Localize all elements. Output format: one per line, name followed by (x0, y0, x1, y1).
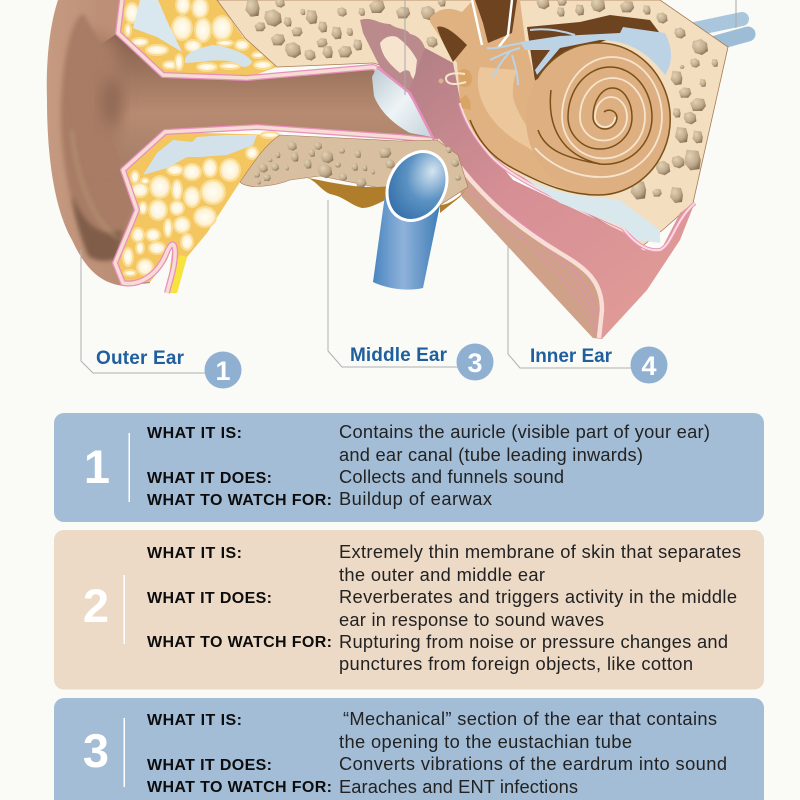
dark chamber behind nerves (527, 15, 665, 82)
mauve middle-ear tissue (360, 19, 460, 140)
details 3: Converts vibrations of the eardrum into sound (339, 753, 727, 774)
details 3: WHAT IT DOES: (147, 757, 272, 774)
eustachian tube (373, 141, 459, 290)
panel 2: eardrum (54, 530, 764, 690)
details 1: WHAT IT DOES: (147, 470, 272, 487)
details 3: WHAT TO WATCH FOR: (147, 779, 332, 796)
upper fat cells (125, 0, 272, 71)
callout: middle ear: Middle Ear (350, 345, 448, 366)
divider (124, 575, 125, 644)
details 2: WHAT IT IS: (147, 545, 242, 562)
details 2: WHAT TO WATCH FOR: (147, 634, 332, 651)
details 1: Buildup of earwax (339, 488, 492, 509)
lower bone pores (254, 141, 461, 187)
cochlear nerve bundle (487, 27, 671, 85)
callout: middle ear: 3 (467, 348, 483, 378)
upper cartilage band (185, 45, 252, 67)
number 2: 2 (83, 579, 109, 632)
details 3: WHAT IT IS: (147, 712, 242, 729)
details 3: “Mechanical” section of the ear that contains (343, 708, 717, 729)
eardrum border (377, 67, 434, 140)
details 2: WHAT IT DOES: (147, 590, 272, 607)
details 1: WHAT TO WATCH FOR: (147, 492, 332, 509)
details 2: Reverberates and triggers activity in the middle (339, 586, 737, 607)
number 1: 1 (84, 440, 110, 493)
details 3: Earaches and ENT infections (339, 776, 578, 797)
lower cartilage (143, 135, 257, 175)
details 2: Rupturing from noise or pressure changes and (339, 631, 728, 652)
bone pores (245, 0, 718, 203)
divider (128, 433, 130, 502)
canal shadow (102, 78, 122, 126)
leader line: top middle (404, 0, 406, 95)
lower temporal bone (240, 135, 468, 205)
muscle region (445, 150, 602, 338)
pink nasopharyngeal tissue (408, 48, 695, 339)
panel 3: middle ear (54, 698, 764, 800)
earwax buildup (303, 177, 390, 208)
details 2: punctures from foreign objects, like cotton (339, 653, 693, 674)
details 1: Collects and funnels sound (339, 466, 564, 487)
skin lining of the canal (115, 0, 432, 293)
temporal bone (217, 0, 728, 248)
lower fat cells (123, 132, 279, 276)
leader line: top right (735, 0, 737, 28)
callout: inner ear: 4 (641, 351, 657, 381)
semicircular canals and vestibule (430, 0, 620, 195)
callout: outer ear: 1 (215, 356, 231, 386)
fluid below cochlea (517, 173, 660, 243)
details 1: WHAT IT IS: (147, 425, 242, 442)
eardrum (372, 67, 432, 137)
stapes (438, 69, 472, 110)
details 3 (147, 708, 727, 797)
details 2: Extremely thin membrane of skin that separates (339, 541, 741, 562)
pale skin lines (437, 103, 695, 338)
callout: outer ear (81, 250, 242, 388)
upper fat tissue (118, 0, 277, 78)
callout: outer ear: Outer Ear (96, 348, 185, 369)
details 1: and ear canal (tube leading inwards) (339, 444, 643, 465)
panel 1: outer ear (54, 413, 764, 522)
number 3: 3 (83, 724, 109, 777)
details 2 (147, 541, 741, 674)
concha blend (82, 30, 122, 170)
details 1 (147, 421, 710, 509)
divider (124, 718, 125, 787)
ear anatomy diagram (47, 0, 748, 339)
muscle fibres (470, 190, 601, 335)
details 2: the outer and middle ear (339, 564, 545, 585)
callout: middle ear (328, 200, 494, 380)
details 1: Contains the auricle (visible part of your ear) (339, 421, 710, 442)
details 3: the opening to the eustachian tube (339, 731, 632, 752)
wax near tube (440, 187, 468, 213)
upper cartilage (133, 0, 182, 52)
cochlea spiral (470, 43, 670, 195)
malleus and incus bones (380, 36, 440, 85)
vestibular nerve tubes (690, 19, 748, 44)
auricle (visible outer ear) (47, 0, 150, 286)
ear canal (99, 33, 432, 168)
lower fat tissue (115, 132, 280, 293)
callout: inner ear (508, 245, 668, 384)
callout: inner ear: Inner Ear (530, 346, 613, 367)
details 2: ear in response to sound waves (339, 609, 604, 630)
